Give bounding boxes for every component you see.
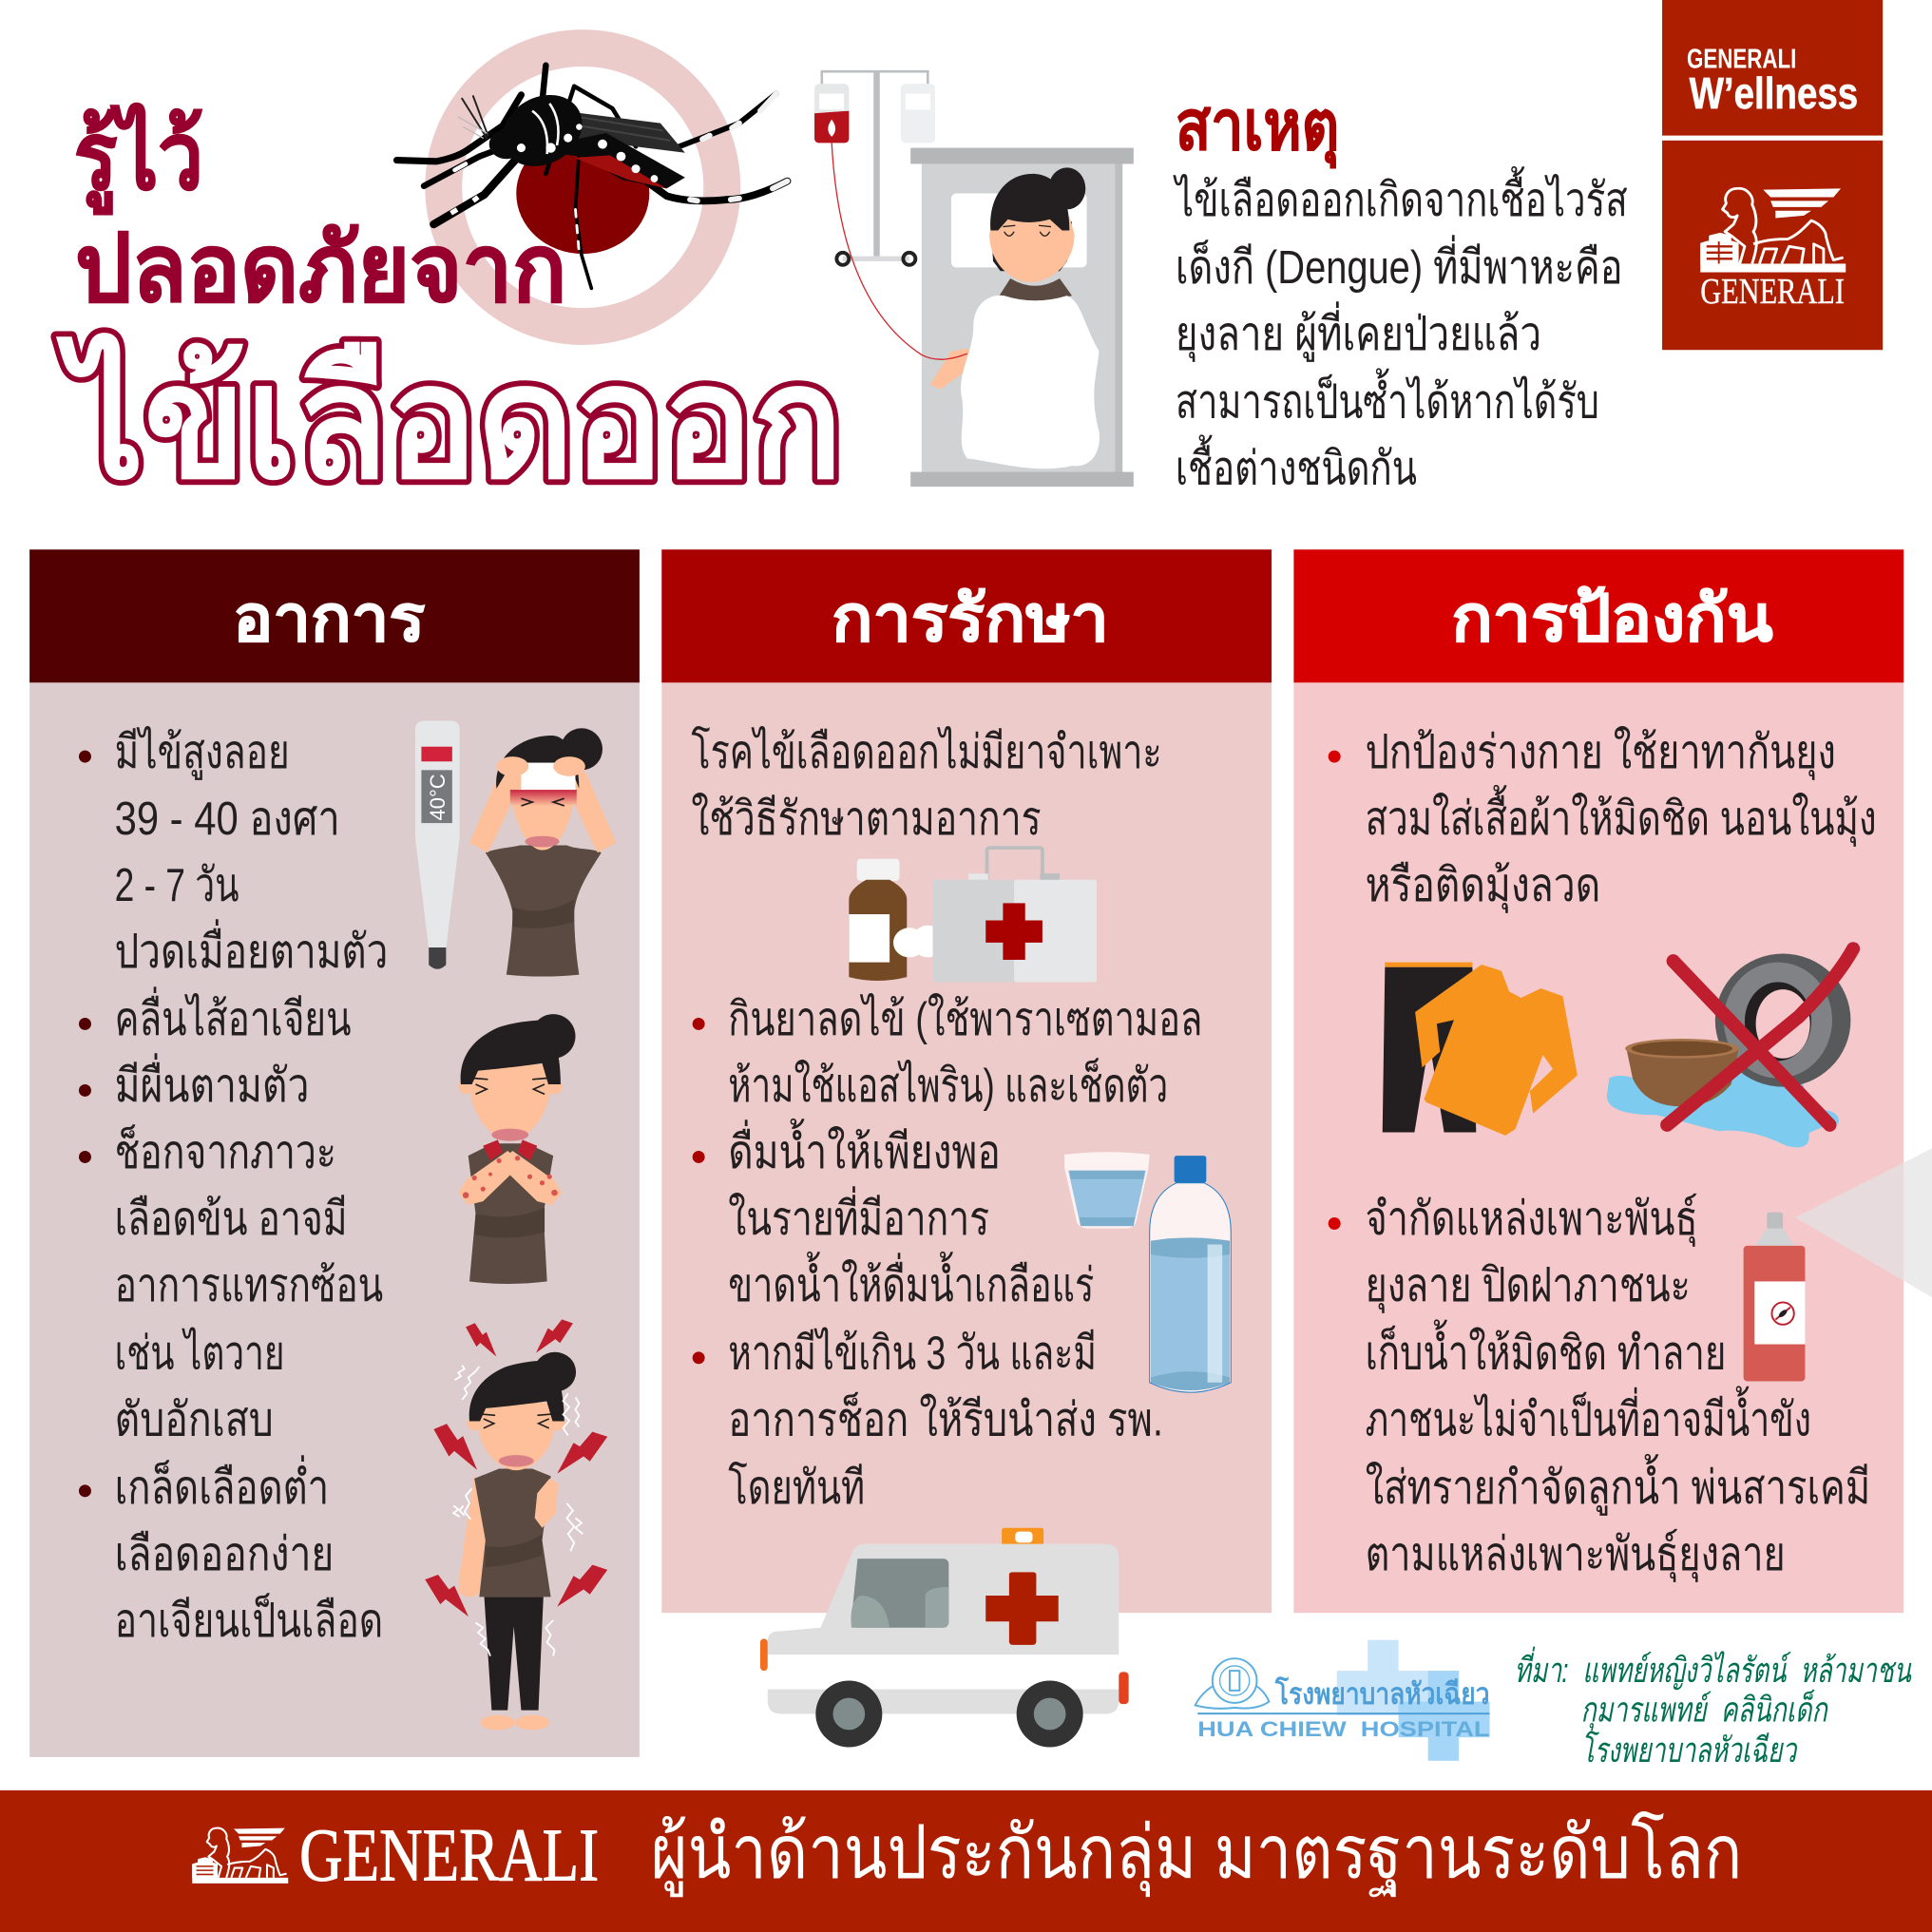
heading: cause: สาเหตุ <box>1176 87 1339 169</box>
text block: symptom list: เช่น ไตวาย <box>115 1326 285 1379</box>
text block: symptom list: ปวดเมื่อยตามตัว <box>115 919 388 978</box>
logo: footer lion <box>192 1828 288 1884</box>
icon: patient in bed <box>910 148 1134 487</box>
text block: cause description: เด็งกี (Dengue) ที่มีพาหะคือ <box>1176 235 1623 294</box>
text block: source credit: โรงพยาบาลหัวเฉียว <box>1580 1731 1798 1769</box>
text block: cause description <box>1173 166 1628 495</box>
text block: limit breeding sites: ตามแหล่งเพาะพันธุ์ยุงลาย <box>1366 1528 1786 1582</box>
text block: symptom list <box>79 725 388 1647</box>
panel: treatment <box>661 549 1272 1613</box>
footer banner <box>0 1790 1932 1932</box>
text block: symptom list: อาเจียนเป็นเลือด <box>115 1593 383 1647</box>
heading: symptoms: อาการ <box>233 583 425 655</box>
logo: hua chiew hospital <box>1196 1640 1490 1761</box>
title: second line: ปลอดภัยจาก <box>75 216 566 320</box>
text block: treatment bullets: ดื่มน้ำให้เพียงพอ <box>728 1119 1001 1178</box>
text block: source credit: กุมารแพทย์ คลินิกเด็ก <box>1580 1689 1828 1731</box>
icon: woman with rash <box>458 1014 575 1284</box>
heading: treatment <box>661 549 1272 682</box>
text block: protect the body: ปกป้องร่างกาย ใช้ยาทากันยุง <box>1366 725 1836 780</box>
logo: generali wellness box: W’ellness <box>1690 68 1858 118</box>
text block: symptom list: เกล็ดเลือดต่ำ <box>115 1455 329 1514</box>
text block: treatment bullets: ในรายที่มีอาการ <box>728 1186 989 1245</box>
text block: treatment bullets: โดยทันที <box>728 1461 865 1514</box>
icon: long clothing <box>1383 963 1578 1136</box>
icon: water bottle <box>1150 1156 1231 1392</box>
text block: cause description: ยุงลาย ผู้ที่เคยป่วยแล้ว <box>1176 301 1541 362</box>
text block: treatment bullets: ขาดน้ำให้ดื่มน้ำเกลือแร่ <box>728 1252 1094 1311</box>
text block: treatment intro: โรคไข้เลือดออกไม่มียาจำเพาะ <box>691 725 1162 778</box>
text block: cause description: เชื้อต่างชนิดกัน <box>1176 435 1417 495</box>
text block: source credit <box>1514 1646 1912 1769</box>
text block: symptom list: 2 - 7 วัน <box>115 859 239 911</box>
title: first line: รู้ไว้ <box>74 103 203 215</box>
icon: woman with fever <box>469 728 616 977</box>
icon: woman with shock <box>425 1319 607 1730</box>
logo: generali wellness box <box>1662 0 1883 136</box>
icon: glass of water <box>1064 1152 1150 1229</box>
text block: symptom list: เลือดข้น อาจมี <box>115 1193 348 1245</box>
logo: footer wordmark: GENERALI <box>299 1815 599 1898</box>
text block: limit breeding sites: เก็บน้ำให้มิดชิด ทำลาย <box>1366 1319 1726 1379</box>
icon: target ring with mosquito <box>396 48 787 327</box>
logo: generali wellness box: GENERALI <box>1687 44 1796 74</box>
text block: treatment bullets <box>693 992 1202 1514</box>
heading: treatment: การรักษา <box>832 583 1109 655</box>
text block: treatment bullets: กินยาลดไข้ (ใช้พาราเซตามอล <box>728 992 1202 1045</box>
icon: medicine bottle and pills <box>849 859 944 981</box>
text block: symptom list: ตับอักเสบ <box>115 1393 274 1445</box>
text block: symptom list: เลือดออกง่าย <box>115 1528 334 1580</box>
text block: symptom list: มีผื่นตามตัว <box>115 1053 309 1112</box>
text block: protect the body: หรือติดมุ้งลวด <box>1366 859 1600 913</box>
text block: treatment bullets: หากมีไข้เกิน 3 วัน และมี <box>728 1326 1097 1379</box>
heading: prevention: การป้องกัน <box>1451 583 1773 655</box>
logo: hua chiew hospital: โรงพยาบาลหัวเฉียว <box>1274 1675 1490 1711</box>
logo: generali lion box: GENERALI <box>1700 272 1845 312</box>
icon: ambulance <box>760 1528 1129 1748</box>
text block: limit breeding sites <box>1329 1193 1870 1582</box>
panel: prevention <box>1293 549 1903 1613</box>
icon: iv drip stand <box>814 71 967 359</box>
text block: treatment bullets: อาการช็อก ให้รีบนำส่ง รพ. <box>728 1391 1163 1445</box>
heading: prevention <box>1293 549 1903 682</box>
icon: no standing water, tyre and bowl <box>1607 948 1853 1147</box>
icon: thermometer <box>415 720 460 969</box>
text block: symptom list: 39 - 40 องศา <box>115 793 340 845</box>
icon: thermometer: 40°C <box>426 774 450 821</box>
icon: insect spray can <box>1744 1148 1932 1381</box>
text block: limit breeding sites: จำกัดแหล่งเพาะพันธุ์ <box>1366 1193 1698 1247</box>
text block: symptom list: มีไข้สูงลอย <box>115 725 290 780</box>
text block: protect the body <box>1329 725 1877 913</box>
text block: cause description: สามารถเป็นซ้ำได้หากได้รับ <box>1176 369 1599 429</box>
panel: symptoms <box>29 549 640 1757</box>
text block: treatment intro <box>691 725 1162 845</box>
title: outlined disease name: ไข้เลือดออก <box>55 333 843 511</box>
logo: generali lion box <box>1662 141 1883 350</box>
text block: cause description: ไข้เลือดออกเกิดจากเชื้อไวรัส <box>1173 166 1628 226</box>
footer slogan: ผู้นำด้านประกันกลุ่ม มาตรฐานระดับโลก <box>651 1810 1742 1898</box>
text block: limit breeding sites: ยุงลาย ปิดฝาภาชนะ <box>1366 1259 1691 1313</box>
text block: symptom list: คลื่นไส้อาเจียน <box>115 986 352 1045</box>
text block: symptom list: ช็อกจากภาวะ <box>115 1124 336 1178</box>
logo: hua chiew hospital: HUA CHIEW HOSPITAL <box>1197 1717 1490 1741</box>
text block: symptom list: อาการแทรกซ้อน <box>115 1259 383 1311</box>
text block: treatment bullets: ห้ามใช้แอสไพริน) และเช็ดตัว <box>728 1058 1168 1112</box>
text block: treatment intro: ใช้วิธีรักษาตามอาการ <box>691 792 1042 845</box>
icon: first aid kit <box>932 848 1097 982</box>
heading: symptoms <box>29 549 640 682</box>
